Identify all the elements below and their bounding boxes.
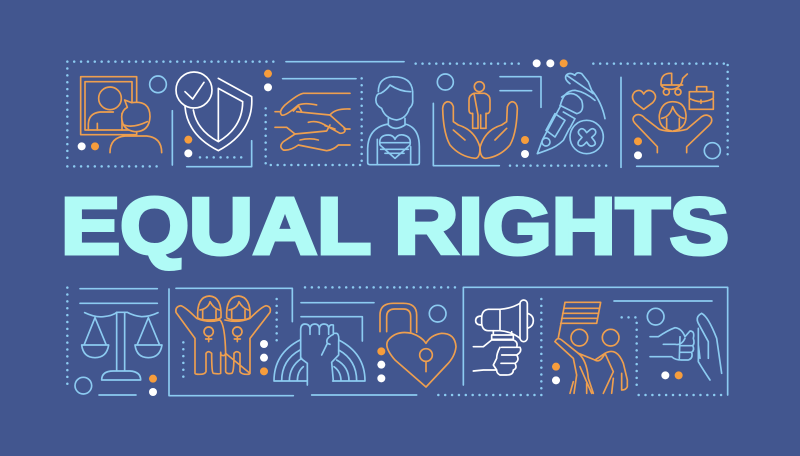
bottom row left half — [67, 287, 417, 396]
title: EQUAL RIGHTS — [61, 182, 729, 270]
icon: person with heart — [368, 77, 419, 165]
icon: people with flag — [555, 302, 627, 393]
icon: mother, baby stroller, heart and briefcase — [632, 73, 713, 153]
icon: two women with raised arms — [176, 296, 270, 374]
top row right half — [416, 59, 728, 167]
panel: bottom icon row — [67, 287, 728, 396]
icon: open padlock heart — [380, 303, 456, 387]
icon: person in open hands — [443, 82, 517, 158]
icon: safety pin with cross — [537, 73, 605, 154]
icon: shield with check — [176, 72, 252, 151]
icon: portrait frame and viewer — [81, 77, 162, 153]
icon: scales of justice — [82, 312, 162, 380]
icon: megaphone in hand — [473, 300, 533, 375]
icon: fist against open palm — [650, 313, 722, 380]
icon: clasped hands — [275, 93, 350, 151]
top row left half — [67, 62, 419, 167]
panel: top icon row — [67, 59, 728, 167]
bottom row right half — [380, 287, 728, 395]
icon: raised fist and rainbow — [274, 324, 365, 385]
